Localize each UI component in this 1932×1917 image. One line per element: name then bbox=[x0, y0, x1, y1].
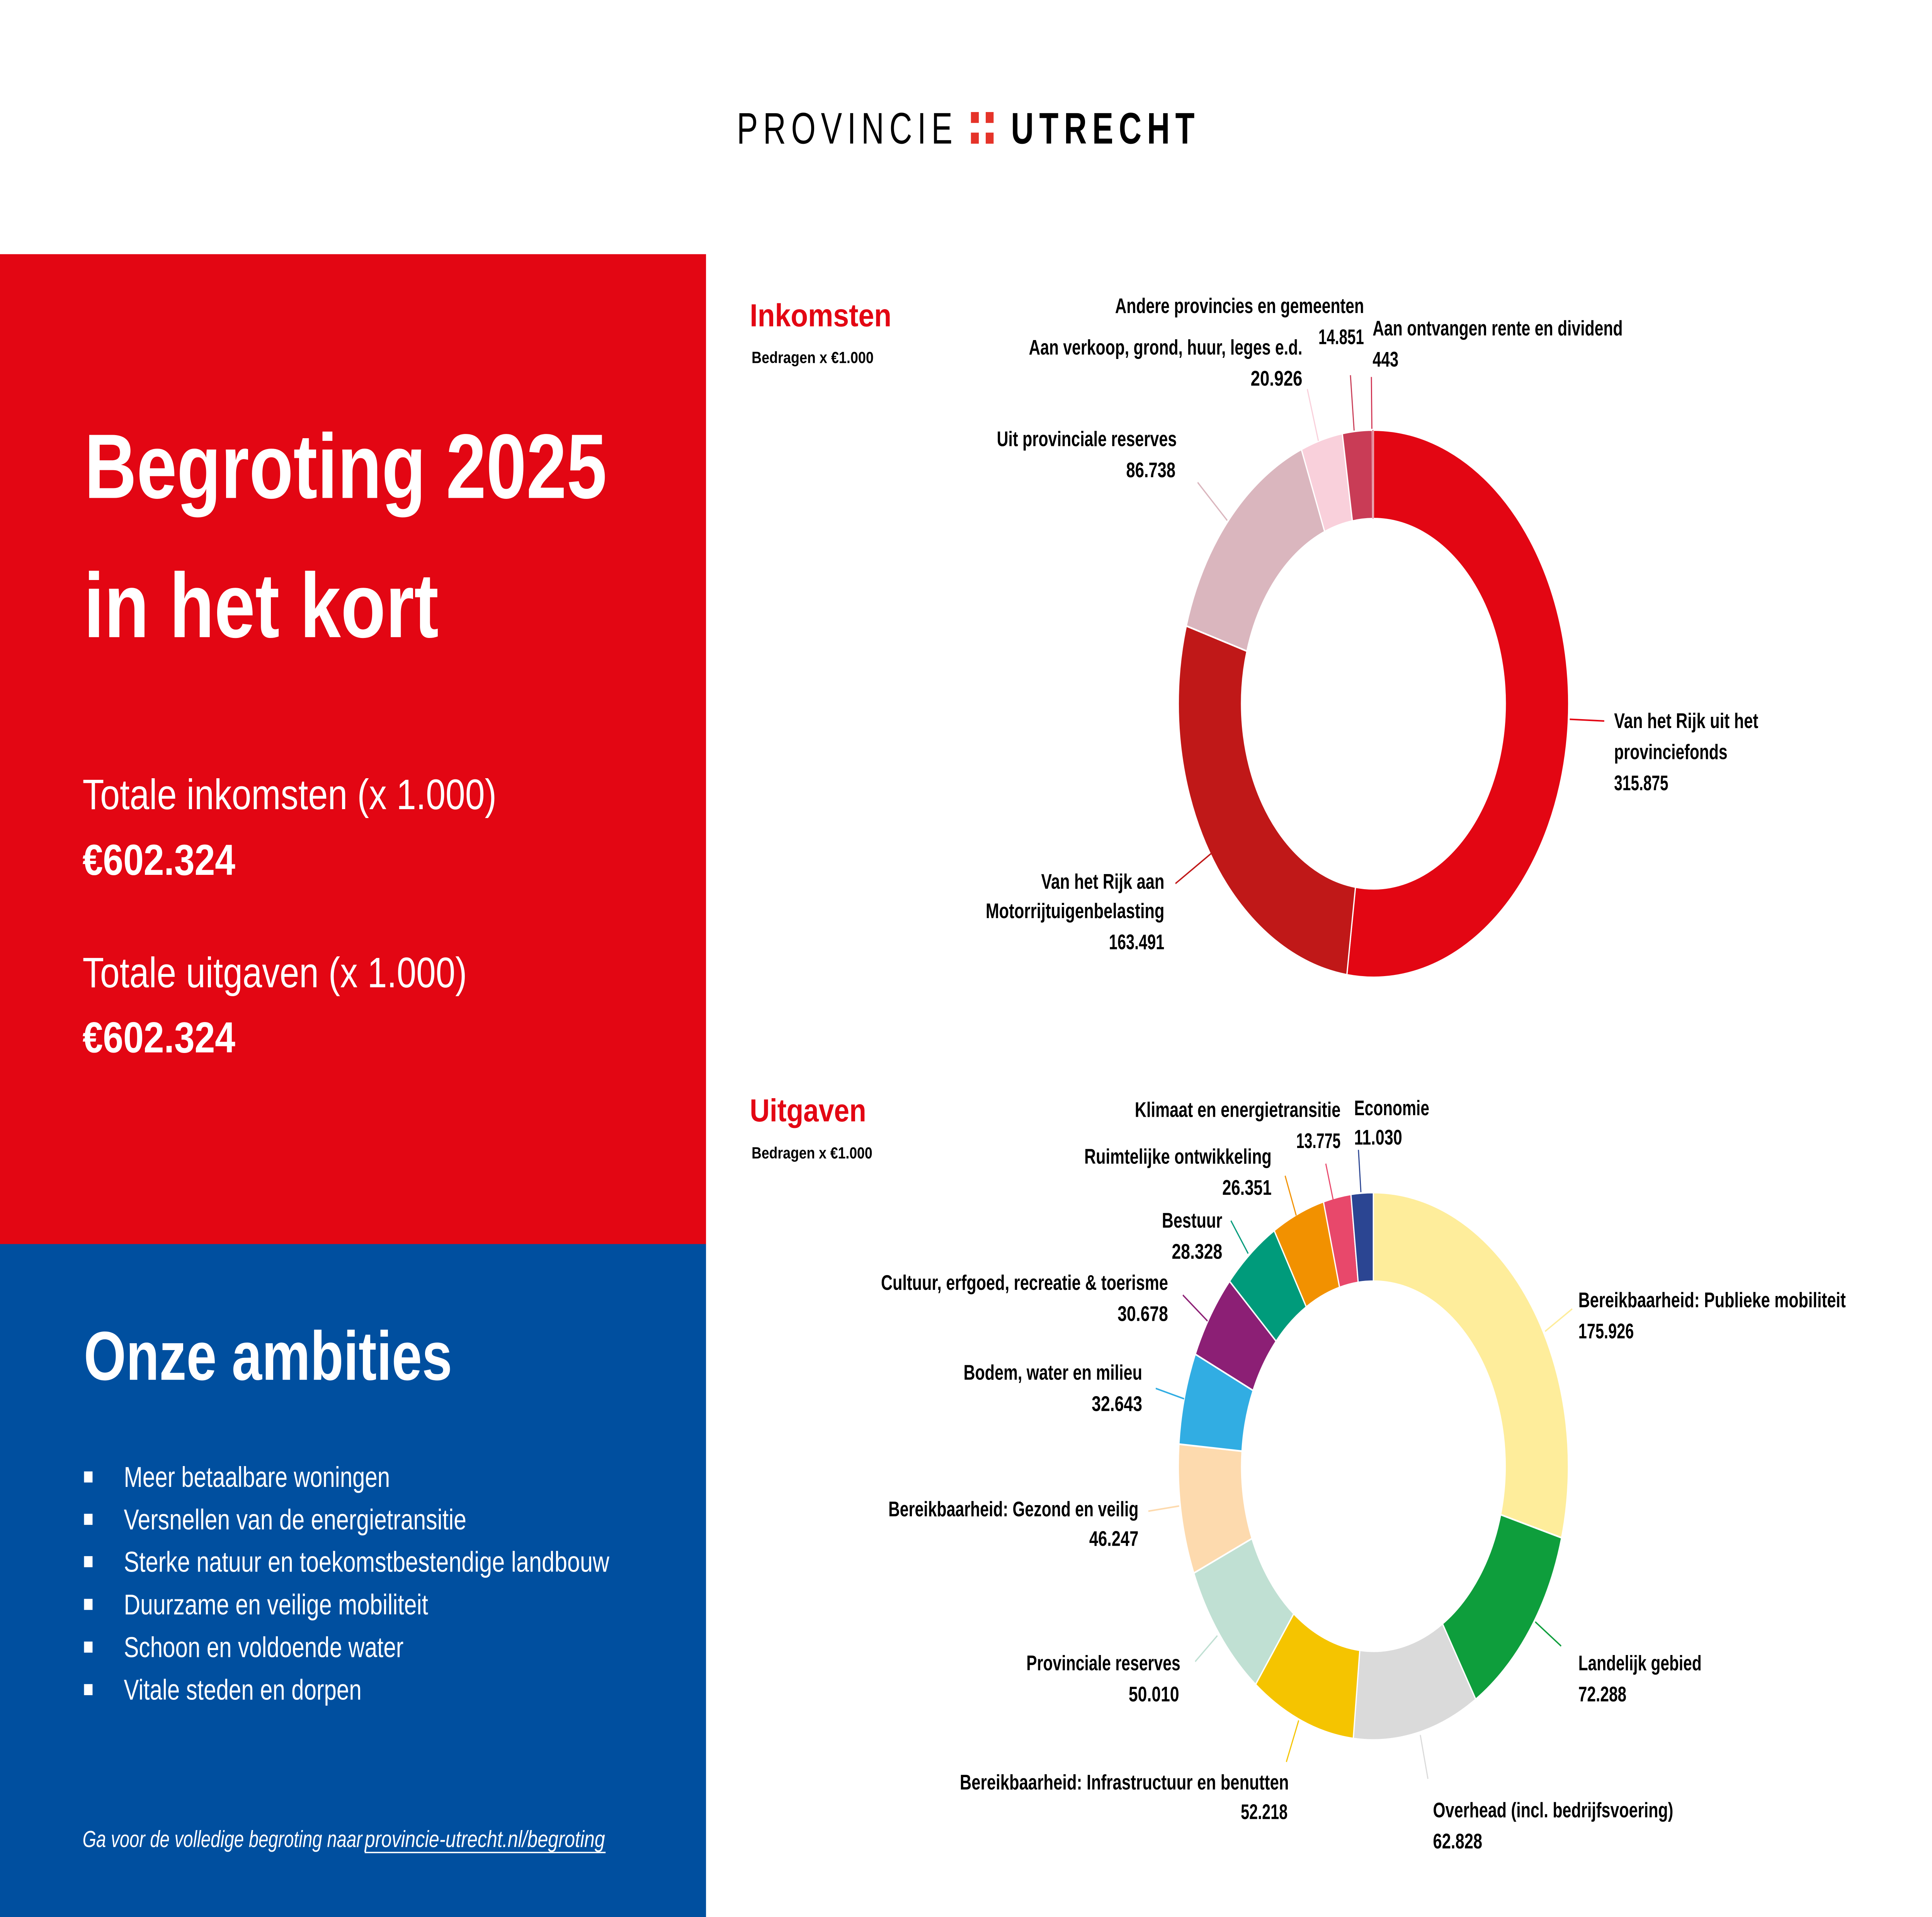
segment: Landelijk gebied bbox=[1442, 1515, 1561, 1699]
label: Bestuur: 28.328 bbox=[1172, 1240, 1222, 1264]
segment: Gezond en veilig bbox=[1178, 1444, 1252, 1573]
ambitions list: Duurzame en veilige mobiliteit bbox=[124, 1589, 428, 1621]
label: Aan ontvangen rente en dividend: Aan ontvangen rente en dividend bbox=[1372, 317, 1623, 340]
label: Van het Rijk uit het provinciefonds: provinciefonds bbox=[1614, 740, 1728, 764]
total expenditure: Totale uitgaven (x 1.000) bbox=[83, 949, 467, 997]
label: Bereikbaarheid: Infrastructuur en benutten: 52.218 bbox=[1241, 1800, 1287, 1824]
panel: ambitions (blue) bbox=[0, 1244, 706, 1917]
label: Uit provinciale reserves: Uit provinciale reserves bbox=[997, 427, 1177, 451]
label: Bodem, water en milieu bbox=[964, 1361, 1142, 1416]
ambitions list: Schoon en voldoende water bbox=[124, 1631, 403, 1664]
label: Uit provinciale reserves: 86.738 bbox=[1126, 459, 1175, 482]
total income bbox=[83, 771, 497, 884]
label: Van het Rijk aan Motorrijtuigenbelasting: Van het Rijk aan bbox=[1041, 870, 1164, 894]
label: Van het Rijk aan Motorrijtuigenbelasting: Motorrijtuigenbelasting bbox=[986, 900, 1164, 923]
label: Overhead (incl. bedrijfsvoering): Overhead (incl. bedrijfsvoering) bbox=[1433, 1798, 1673, 1822]
segment: Aan verkoop, grond, huur, leges bbox=[1301, 434, 1352, 532]
logo: Provincie Utrecht bbox=[737, 104, 1195, 153]
segment: Publieke mobiliteit bbox=[1373, 1192, 1568, 1538]
label: Bereikbaarheid: Gezond en veilig: Bereikbaarheid: Gezond en veilig bbox=[888, 1498, 1138, 1521]
label: Van het Rijk uit het provinciefonds bbox=[1614, 709, 1758, 795]
segment: Economie bbox=[1351, 1192, 1373, 1283]
ambitions list: Vitale steden en dorpen bbox=[124, 1674, 362, 1706]
label: Klimaat en energietransitie bbox=[1135, 1098, 1340, 1153]
label: Economie bbox=[1354, 1097, 1429, 1150]
panel: Inkomsten bbox=[750, 294, 1758, 977]
label: Bereikbaarheid: Publieke mobiliteit: Bereikbaarheid: Publieke mobiliteit bbox=[1578, 1288, 1846, 1312]
label: Landelijk gebied bbox=[1578, 1652, 1702, 1706]
label: Provinciale reserves: Provinciale reserves bbox=[1026, 1652, 1180, 1675]
donut chart: income bbox=[1178, 430, 1569, 977]
leader lines: income bbox=[1175, 375, 1604, 884]
label: Aan verkoop, grond, huur, leges e.d.: 20.926 bbox=[1251, 367, 1303, 391]
ambitions list bbox=[84, 1461, 609, 1706]
label: Andere provincies en gemeenten: 14.851 bbox=[1318, 325, 1364, 349]
segment: Ruimtelijke ontwikkeling bbox=[1274, 1202, 1340, 1307]
segment: Aan ontvangen rente en dividend bbox=[1372, 430, 1373, 519]
label: Ruimtelijke ontwikkeling bbox=[1084, 1145, 1272, 1200]
label: Ruimtelijke ontwikkeling: Ruimtelijke ontwikkeling bbox=[1084, 1145, 1272, 1169]
total income: Totale inkomsten (x 1.000) bbox=[83, 771, 497, 818]
label: Cultuur, erfgoed, recreatie & toerisme: 30.678 bbox=[1117, 1302, 1168, 1326]
label: Cultuur, erfgoed, recreatie & toerisme: Cultuur, erfgoed, recreatie & toerisme bbox=[881, 1271, 1168, 1295]
label: Andere provincies en gemeenten: Andere provincies en gemeenten bbox=[1115, 294, 1364, 318]
label: Van het Rijk aan Motorrijtuigenbelasting: 163.491 bbox=[1109, 930, 1164, 954]
donut chart: expenditure bbox=[1178, 1192, 1568, 1740]
ambitions list: Meer betaalbare woningen bbox=[124, 1461, 390, 1493]
logo: Provincie Utrecht: PROVINCIE bbox=[737, 104, 952, 153]
segment: Motorrijtuigenbelasting bbox=[1178, 626, 1355, 975]
label: Klimaat en energietransitie: Klimaat en energietransitie bbox=[1135, 1098, 1340, 1122]
segment: Infrastructuur en benutten bbox=[1255, 1614, 1360, 1738]
label: Aan verkoop, grond, huur, leges e.d. bbox=[1029, 336, 1303, 391]
label: Provinciale reserves: 50.010 bbox=[1129, 1683, 1179, 1706]
segment: Cultuur, erfgoed, recreatie & toerisme bbox=[1195, 1281, 1276, 1390]
title: in het kort bbox=[84, 555, 439, 657]
logo: Provincie Utrecht: UTRECHT bbox=[1011, 104, 1195, 153]
label: Aan ontvangen rente en dividend: 443 bbox=[1372, 348, 1398, 371]
label: Van het Rijk aan Motorrijtuigenbelasting bbox=[986, 870, 1164, 954]
label: Bereikbaarheid: Gezond en veilig bbox=[888, 1498, 1138, 1551]
label: Bodem, water en milieu: Bodem, water en milieu bbox=[964, 1361, 1142, 1385]
label: Bereikbaarheid: Publieke mobiliteit: 175.926 bbox=[1578, 1320, 1634, 1343]
label: Bereikbaarheid: Gezond en veilig: 46.247 bbox=[1089, 1527, 1138, 1551]
segment: Overhead bbox=[1353, 1624, 1476, 1740]
label: Provinciale reserves bbox=[1026, 1652, 1180, 1706]
total expenditure bbox=[83, 949, 467, 1062]
label: Overhead (incl. bedrijfsvoering): 62.828 bbox=[1433, 1830, 1482, 1853]
heading: Onze ambities: Onze ambities bbox=[84, 1317, 452, 1395]
total expenditure: €602.324 bbox=[83, 1013, 235, 1062]
leader lines: expenditure bbox=[1148, 1150, 1572, 1779]
footer link text bbox=[83, 1827, 605, 1853]
label: Landelijk gebied: 72.288 bbox=[1578, 1683, 1626, 1706]
ambitions list: Versnellen van de energietransitie bbox=[124, 1504, 466, 1536]
label: Andere provincies en gemeenten bbox=[1115, 294, 1364, 349]
footer link text: Ga voor de volledige begroting naar bbox=[83, 1827, 363, 1852]
label: Landelijk gebied: Landelijk gebied bbox=[1578, 1652, 1702, 1675]
segment: Uit provinciale reserves bbox=[1186, 449, 1325, 651]
label: Aan ontvangen rente en dividend bbox=[1372, 317, 1623, 371]
panel: Uitgaven bbox=[750, 1093, 1846, 1853]
label: Aan verkoop, grond, huur, leges e.d.: Aan verkoop, grond, huur, leges e.d. bbox=[1029, 336, 1303, 359]
segment: Van het Rijk uit het provinciefonds bbox=[1347, 430, 1569, 977]
label: Bereikbaarheid: Publieke mobiliteit bbox=[1578, 1288, 1846, 1343]
segment: Andere provincies en gemeenten bbox=[1342, 430, 1373, 521]
segment: Klimaat en energietransitie bbox=[1323, 1194, 1358, 1288]
label: Bereikbaarheid: Infrastructuur en benutten: Bereikbaarheid: Infrastructuur en benutten bbox=[960, 1771, 1289, 1795]
heading: Uitgaven: Uitgaven bbox=[750, 1093, 866, 1129]
panel: totals (red) bbox=[0, 254, 706, 1244]
subheading: amounts: Bedragen x €1.000 bbox=[752, 1144, 872, 1162]
segment: Bestuur bbox=[1230, 1231, 1306, 1341]
label: Klimaat en energietransitie: 13.775 bbox=[1296, 1129, 1340, 1153]
label: Overhead (incl. bedrijfsvoering) bbox=[1433, 1798, 1673, 1853]
label: Economie: 11.030 bbox=[1354, 1126, 1402, 1150]
label: Bodem, water en milieu: 32.643 bbox=[1092, 1392, 1142, 1416]
label: Bestuur: Bestuur bbox=[1162, 1209, 1222, 1233]
subheading: amounts: Bedragen x €1.000 bbox=[752, 349, 874, 367]
total income: €602.324 bbox=[83, 836, 235, 884]
label: Van het Rijk uit het provinciefonds: Van het Rijk uit het bbox=[1614, 709, 1758, 733]
heading: Inkomsten: Inkomsten bbox=[750, 298, 891, 333]
label: Economie: Economie bbox=[1354, 1097, 1429, 1120]
label: Van het Rijk uit het provinciefonds: 315.875 bbox=[1614, 772, 1668, 795]
footer link text: provincie-utrecht.nl/begroting bbox=[364, 1827, 605, 1852]
label: Bereikbaarheid: Infrastructuur en benutten bbox=[960, 1771, 1289, 1824]
title bbox=[84, 415, 607, 657]
label: Ruimtelijke ontwikkeling: 26.351 bbox=[1222, 1176, 1272, 1200]
ambitions list: Sterke natuur en toekomstbestendige landbouw bbox=[124, 1546, 609, 1578]
segment: Provinciale reserves bbox=[1194, 1539, 1294, 1684]
label: Bestuur bbox=[1162, 1209, 1222, 1264]
label: Uit provinciale reserves bbox=[997, 427, 1177, 482]
label: Cultuur, erfgoed, recreatie & toerisme bbox=[881, 1271, 1168, 1326]
segment: Bodem, water en milieu bbox=[1179, 1354, 1253, 1451]
title: Begroting 2025 bbox=[84, 415, 607, 517]
